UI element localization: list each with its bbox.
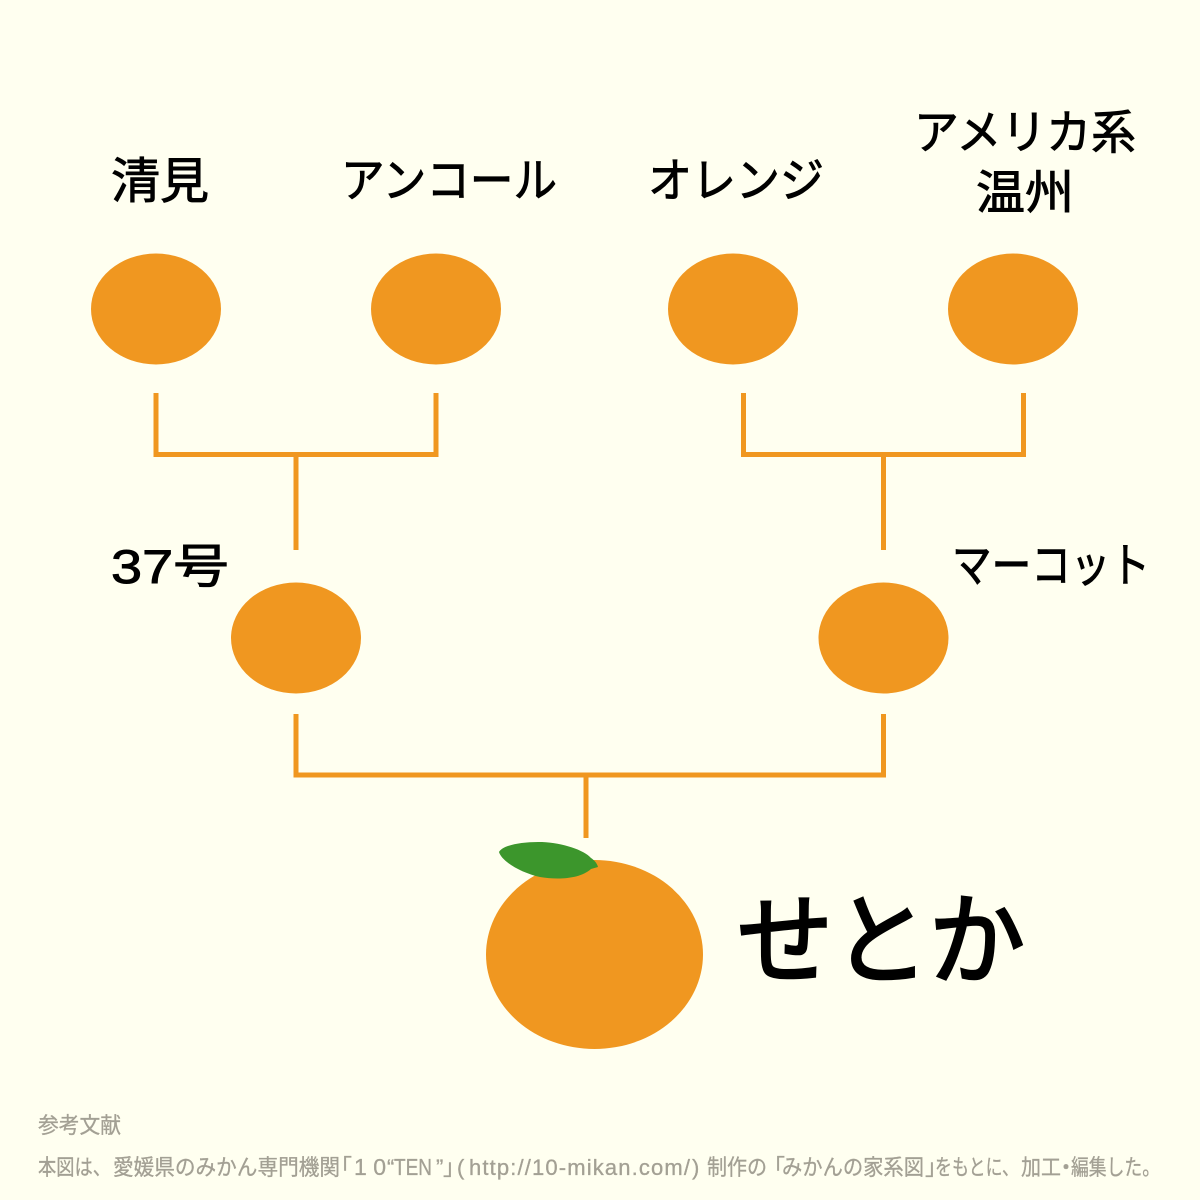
fruit: アメリカ系温州 xyxy=(948,254,1078,364)
fruit: アンコール xyxy=(371,254,501,364)
fruit: 清見 xyxy=(91,254,221,364)
heading: 参考文献: 参考文献 xyxy=(38,1113,121,1138)
label: アメリカ系温州: 温州 xyxy=(976,166,1074,219)
label: 清見: 清見 xyxy=(111,155,209,209)
label: アンコール: アンコール xyxy=(341,154,557,207)
source note: 「 xyxy=(763,1155,785,1180)
source note: ” xyxy=(436,1155,443,1180)
source note: 本図は、 xyxy=(38,1155,111,1180)
source note: をもとに、 xyxy=(935,1155,1019,1180)
fruit: マーコット xyxy=(818,582,948,694)
source note: みかんの家系図 xyxy=(782,1155,924,1180)
connector: 清見 and アンコール to 37号 xyxy=(156,393,436,550)
connector: オレンジ and アメリカ系温州 to マーコット xyxy=(744,393,1024,550)
fruit: 37号 xyxy=(231,582,361,694)
source note: ( xyxy=(457,1155,465,1180)
source note: 愛媛県のみかん専門機関 xyxy=(113,1155,340,1180)
source note: TEN xyxy=(394,1154,432,1180)
label: オレンジ: オレンジ xyxy=(648,154,824,207)
source note: 加工 xyxy=(1021,1155,1061,1180)
label: アメリカ系温州 xyxy=(914,106,1136,219)
title: せとか: せとか xyxy=(737,886,1025,998)
source note: 10 xyxy=(354,1154,386,1180)
source note: 制作の xyxy=(707,1155,767,1180)
source note: 」 xyxy=(925,1155,947,1180)
source note: ) xyxy=(692,1155,699,1180)
label: 37号: 37号 xyxy=(111,540,229,593)
fruit: オレンジ xyxy=(668,254,798,364)
source note: “ xyxy=(387,1155,394,1180)
source note: 編集した。 xyxy=(1071,1155,1160,1180)
source note: 「 xyxy=(330,1155,352,1180)
connector: 37号 and マーコット to せとか xyxy=(296,714,884,838)
source note xyxy=(38,1154,1160,1180)
label: アメリカ系温州: アメリカ系 xyxy=(914,106,1136,159)
source note: http://10-mikan.com/ xyxy=(469,1155,691,1180)
icon: leaf xyxy=(499,842,598,878)
label: マーコット: マーコット xyxy=(952,539,1150,592)
fruit: せとか xyxy=(486,860,703,1049)
source note: ・ xyxy=(1055,1155,1077,1180)
source note: 」 xyxy=(443,1155,465,1180)
